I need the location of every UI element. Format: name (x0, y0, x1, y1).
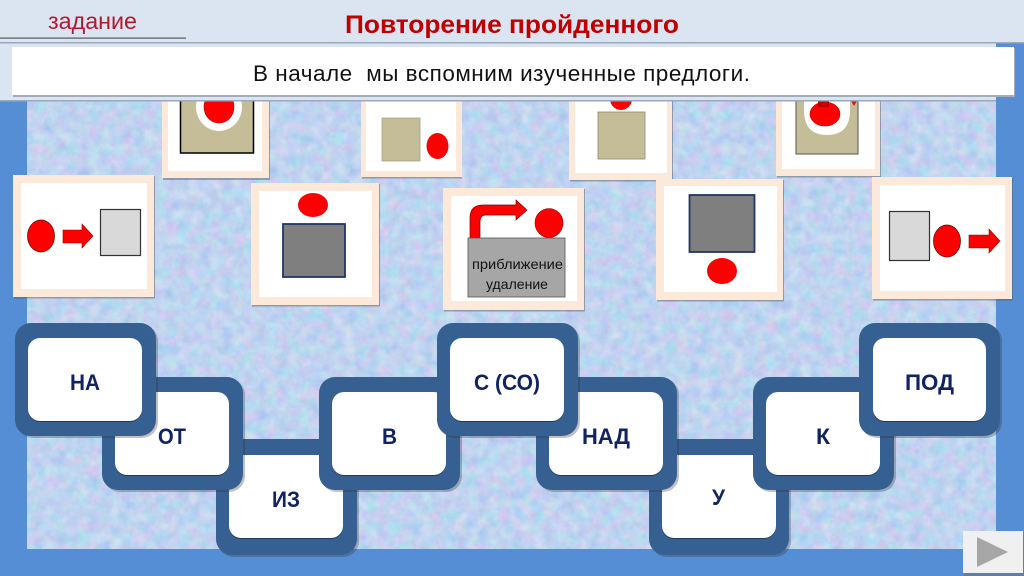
preposition tile: ПОД (859, 323, 1002, 438)
picture card: movement away from square (ОТ) (872, 177, 1013, 300)
preposition tile: В (319, 377, 462, 492)
title: Повторение пройденного (345, 11, 679, 39)
instruction box: В начале мы вспомним изученные предлоги. (253, 61, 750, 86)
preposition tile: К: К (816, 424, 831, 449)
preposition tile: НА: НА (70, 370, 100, 395)
picture card: ball above square (НАД) (251, 183, 380, 306)
picture card: ball leaving square opening (top row 4) (776, 60, 881, 178)
picture card: square with ball inside (top row 1) (162, 60, 270, 180)
preposition tile: С (СО): С (СО) (474, 370, 540, 395)
preposition tile: ПОД: ПОД (905, 370, 954, 395)
preposition tile: ОТ (102, 377, 245, 492)
icon: bent red arrow (470, 200, 527, 239)
picture card: approaching and leaving: приближение (472, 256, 563, 272)
preposition tile: ОТ: ОТ (158, 424, 187, 449)
instruction box (12, 47, 1015, 97)
preposition tile: К (753, 377, 896, 492)
preposition tile: НАД: НАД (582, 424, 630, 449)
preposition tile: НАД (536, 377, 679, 492)
preposition tile: У: У (712, 485, 725, 510)
preposition tile: У (649, 439, 791, 557)
preposition tile: НА (15, 323, 158, 438)
preposition tile: ИЗ: ИЗ (272, 487, 300, 512)
picture card: ball on top of square (top row 3) (569, 60, 673, 182)
picture card: approaching and leaving: удаление (486, 276, 548, 292)
picture card: ball beside square (top row 2) (361, 60, 462, 178)
picture card: approaching and leaving (443, 188, 585, 312)
picture card: ball under square (ПОД) (656, 179, 784, 302)
preposition tile: С (СО) (437, 323, 580, 438)
preposition tile: ИЗ (216, 439, 359, 557)
task label: задание (48, 8, 137, 34)
preposition tile: В: В (382, 424, 397, 449)
header instruction band (0, 0, 1024, 102)
picture card: movement towards square (К) (13, 175, 155, 298)
next slide button (963, 531, 1024, 576)
